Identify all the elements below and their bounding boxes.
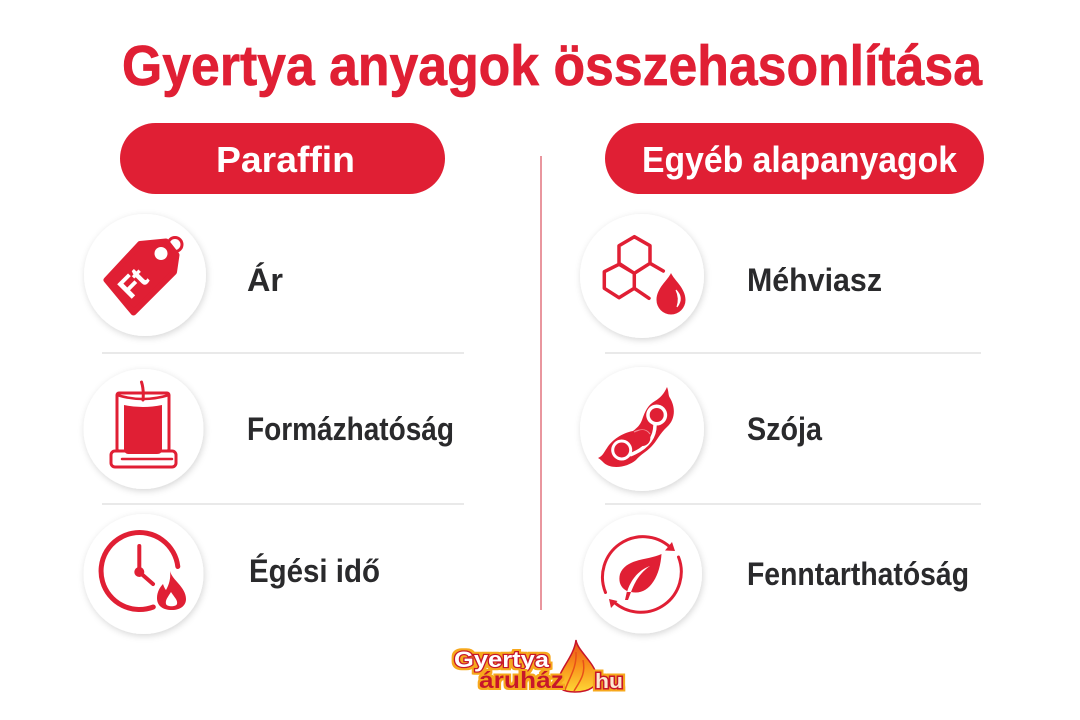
icon: price tag [84,214,206,336]
logo: Gyertya áruház hu [454,640,623,693]
pill heading: Paraffin [120,123,445,194]
icon: clock with flame [84,514,204,634]
pill heading: Paraffin: Paraffin [216,139,355,180]
icon: leaf in recycling arrows [583,514,702,634]
logo flame [558,640,597,692]
label: Szója: Szója [747,411,822,447]
title: Gyertya anyagok összehasonlítása [122,34,983,98]
icon: soybean pod [580,367,704,491]
label: Fenntarthatóság: Fenntarthatóság [747,556,969,592]
label: Méhviasz: Méhviasz [747,262,882,298]
label: Formázhatóság: Formázhatóság [247,411,454,447]
label: Égési idő: Égési idő [249,553,380,589]
label: Ár: Ár [247,262,283,298]
pill heading: Egyéb alapanyagok: Egyéb alapanyagok [642,139,958,180]
icon: candle [84,369,204,489]
pill heading: Egyéb alapanyagok [605,123,984,194]
icon: price tag: Ft [113,262,155,305]
logo: Gyertya áruház hu: áruház [479,667,564,693]
icon: honeycomb and drop [580,214,704,338]
logo: Gyertya áruház hu: hu [595,671,623,693]
logo: Gyertya áruház hu: Gyertya [454,647,550,672]
